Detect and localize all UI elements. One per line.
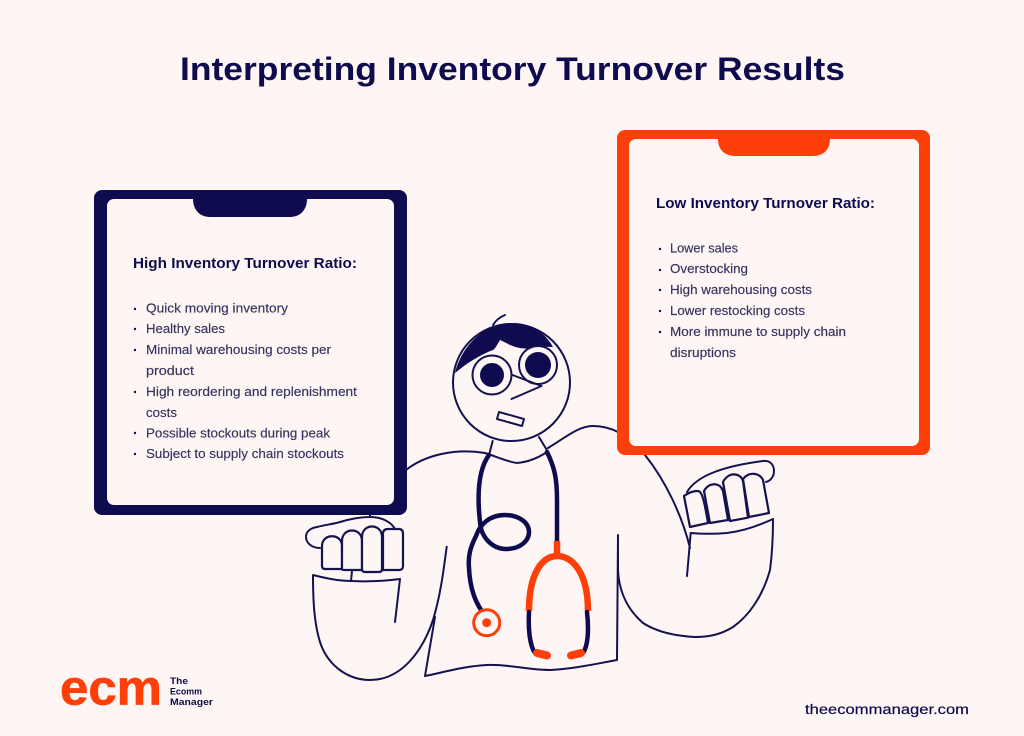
list: high ratio traits: product xyxy=(146,364,195,378)
heading: high ratio: High Inventory Turnover Ratio: xyxy=(133,256,357,272)
list: high ratio traits xyxy=(134,302,358,461)
panel: low inventory turnover clipboard xyxy=(617,130,930,455)
head xyxy=(453,315,570,441)
logo: ecm: ecm xyxy=(60,662,162,716)
list: low ratio traits: High warehousing costs xyxy=(670,283,812,297)
panel: high inventory turnover clipboard xyxy=(94,190,407,515)
list: low ratio traits: More immune to supply chain xyxy=(670,325,846,339)
logo: ecm: The xyxy=(170,676,188,687)
list: high ratio traits: Quick moving inventory xyxy=(146,302,289,316)
title: Interpreting Inventory Turnover Results xyxy=(180,51,845,87)
right arm xyxy=(618,455,773,637)
logo: ecm: Manager xyxy=(170,697,213,708)
list: high ratio traits: Healthy sales xyxy=(146,322,225,336)
logo: ecm: Ecomm xyxy=(170,686,202,698)
list: low ratio traits: Overstocking xyxy=(670,262,748,276)
list: low ratio traits xyxy=(659,242,846,360)
logo: ecm xyxy=(60,662,213,716)
illustration: doctor xyxy=(306,315,774,680)
list: high ratio traits: Subject to supply chain stockouts xyxy=(146,447,344,461)
left hand xyxy=(306,515,403,581)
left arm xyxy=(313,547,447,680)
heading: low ratio: Low Inventory Turnover Ratio: xyxy=(656,196,875,212)
list: high ratio traits: High reordering and replenishment xyxy=(146,385,358,399)
website url: theecommanager.com xyxy=(805,702,969,717)
right hand xyxy=(684,461,774,527)
stethoscope xyxy=(469,452,588,656)
list: low ratio traits: disruptions xyxy=(670,346,736,360)
body outline xyxy=(406,426,618,676)
list: low ratio traits: Lower restocking costs xyxy=(670,304,805,318)
list: high ratio traits: Minimal warehousing costs per xyxy=(146,343,331,357)
list: high ratio traits: Possible stockouts during peak xyxy=(146,426,331,440)
list: high ratio traits: costs xyxy=(146,406,177,420)
list: low ratio traits: Lower sales xyxy=(670,242,738,256)
